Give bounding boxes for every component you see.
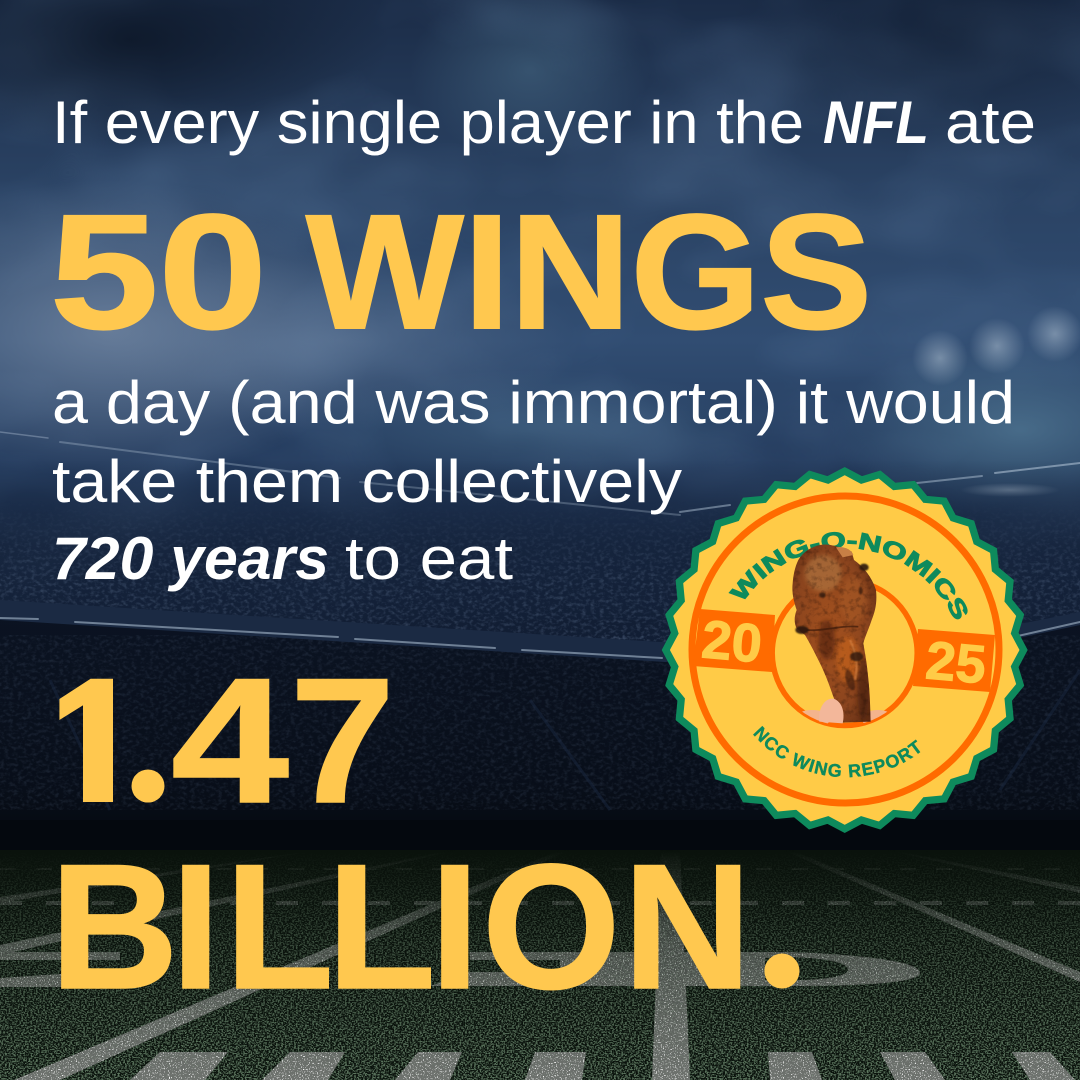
field markings: [0, 850, 1080, 1080]
badge band right: [913, 629, 995, 692]
big word: billion: .: [753, 827, 802, 1026]
football field: [0, 850, 1080, 1080]
stadium lights: [912, 306, 1080, 386]
roof lines: [0, 432, 1080, 515]
big number: 50 wings: [50, 180, 872, 363]
roof band: [0, 600, 1080, 662]
big number: 50 wings: 50: [50, 180, 267, 363]
lower stands: [0, 612, 1080, 852]
intro text: line 1: If every single player in the: [52, 89, 804, 156]
big number: 1.47: 1: [48, 641, 147, 840]
body text: lines 2 to 4: 720 years: [52, 525, 329, 592]
big number: 1.47: .: [122, 641, 171, 840]
badge scalloped edge: [663, 468, 1027, 832]
badge year left: 20: [699, 609, 764, 674]
big number: 1.47: 7: [290, 641, 395, 840]
grass specks: [0, 880, 1080, 1080]
body text: lines 2 to 4: a day (and was immortal) it would: [52, 369, 1015, 436]
badge band left: [693, 609, 775, 672]
icon: hand fingers: [802, 710, 888, 724]
intro text: line 1: NFL: [823, 89, 929, 156]
icon: thumb: [819, 699, 844, 723]
badge: NCC Wing Report seal: [662, 467, 1028, 833]
big number: 1.47: 4: [171, 641, 289, 840]
badge title: WING-O-NOMICS: [728, 532, 968, 620]
upper stands: [0, 475, 1080, 642]
badge subtitle: NCC WING REPORT: [753, 726, 920, 778]
big number: 1.47: [59, 678, 388, 803]
big word: billion: [61, 863, 800, 990]
body text: lines 2 to 4: to eat: [345, 525, 513, 592]
body text: lines 2 to 4: [52, 369, 1015, 592]
big number: 50 wings: WINGS: [306, 180, 872, 363]
badge year right: 25: [923, 630, 988, 695]
icon: chicken drumstick: [790, 543, 880, 725]
badge outer ring: [692, 496, 999, 803]
sky with clouds: [0, 0, 1080, 620]
body text: lines 2 to 4: take them collectively: [52, 448, 682, 515]
big word: billion: BILLION: [50, 827, 752, 1026]
intro text: line 1: ate: [945, 89, 1036, 156]
badge inner circle: [772, 580, 917, 726]
